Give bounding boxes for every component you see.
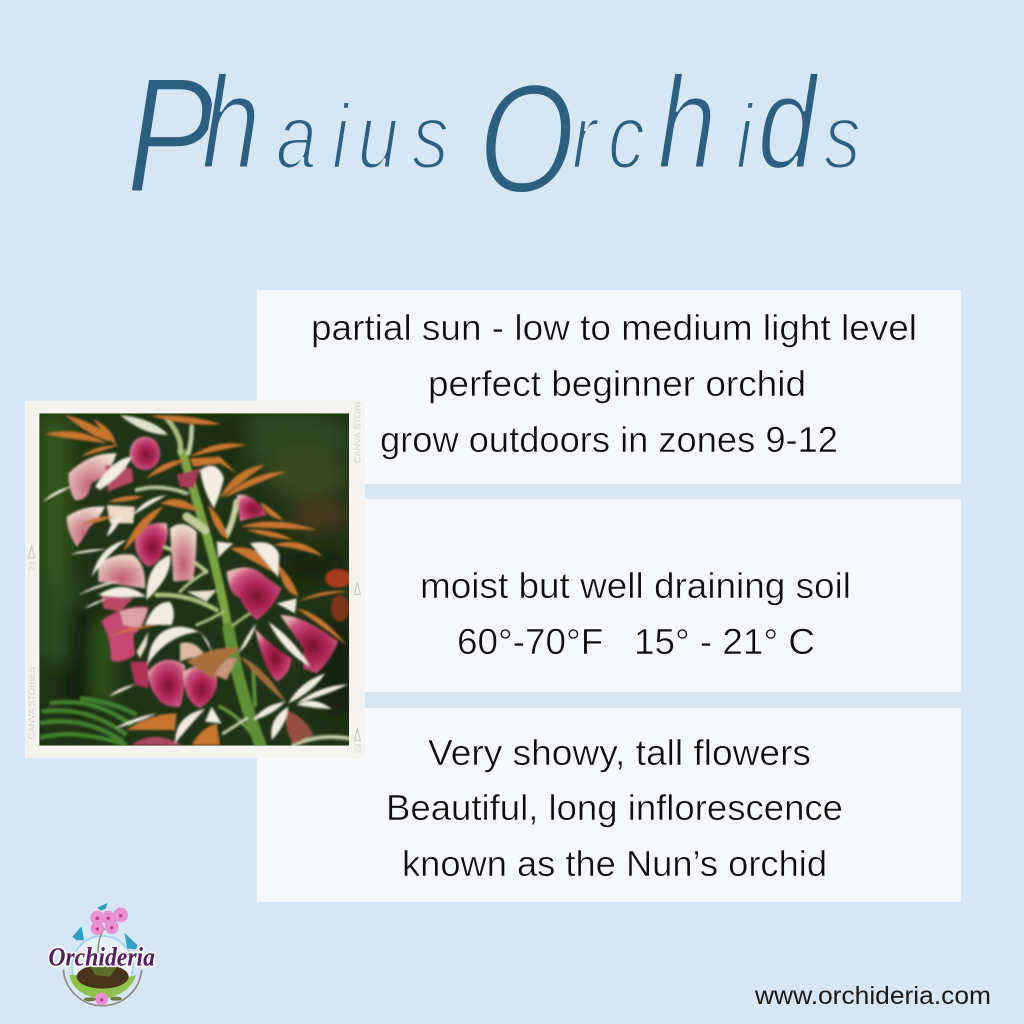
frame edge text: CANVA STORIES [27,666,37,739]
logo wordmark: Orchideria [48,943,155,972]
orange sepals [45,415,348,745]
panel: light and growing [257,290,961,484]
title: P [126,43,214,227]
title: i [736,85,755,188]
website url: www.orchideria.com [754,982,991,1010]
stems [137,418,348,746]
pink lips [67,437,338,746]
title: s [412,85,469,188]
text: nun's orchid: known as the Nun’s orchid [402,843,827,884]
title: h [202,50,260,197]
icon: butterflies [72,903,137,949]
title: d [758,50,819,197]
title: a [276,85,317,188]
icon: orchid flowers [84,908,128,1005]
text: showy flowers: Very showy, tall flowers [428,732,811,773]
panel: flower description [257,708,961,902]
text: soil: moist but well draining soil [420,565,851,606]
title: c [608,85,645,188]
frame edge text [27,402,362,753]
text: inflorescence: Beautiful, long inflorescence [386,787,843,828]
frame edge text: CANVA STORI [352,402,362,463]
frame edge text: 23 [27,561,37,571]
icon: glass bowl [63,936,142,1006]
text: beginner orchid: perfect beginner orchid [428,363,806,404]
text: zones: grow outdoors in zones 9-12 [380,419,838,460]
title: i [332,85,351,188]
logo: Orchideria [48,903,155,1006]
photo: phaius orchid in film frame [25,401,365,758]
text: partial sun: partial sun - low to medium light level [311,307,917,348]
title: s [824,85,861,188]
white petals [43,415,348,743]
title: O [478,52,575,225]
text: temperature: 60°-70°F 15° - 21° C [457,621,815,662]
frame edge text: 23 [352,744,362,753]
title: h [658,50,716,197]
panel: soil and temperature [257,499,961,692]
title: r [572,85,599,188]
title: u [358,85,399,188]
